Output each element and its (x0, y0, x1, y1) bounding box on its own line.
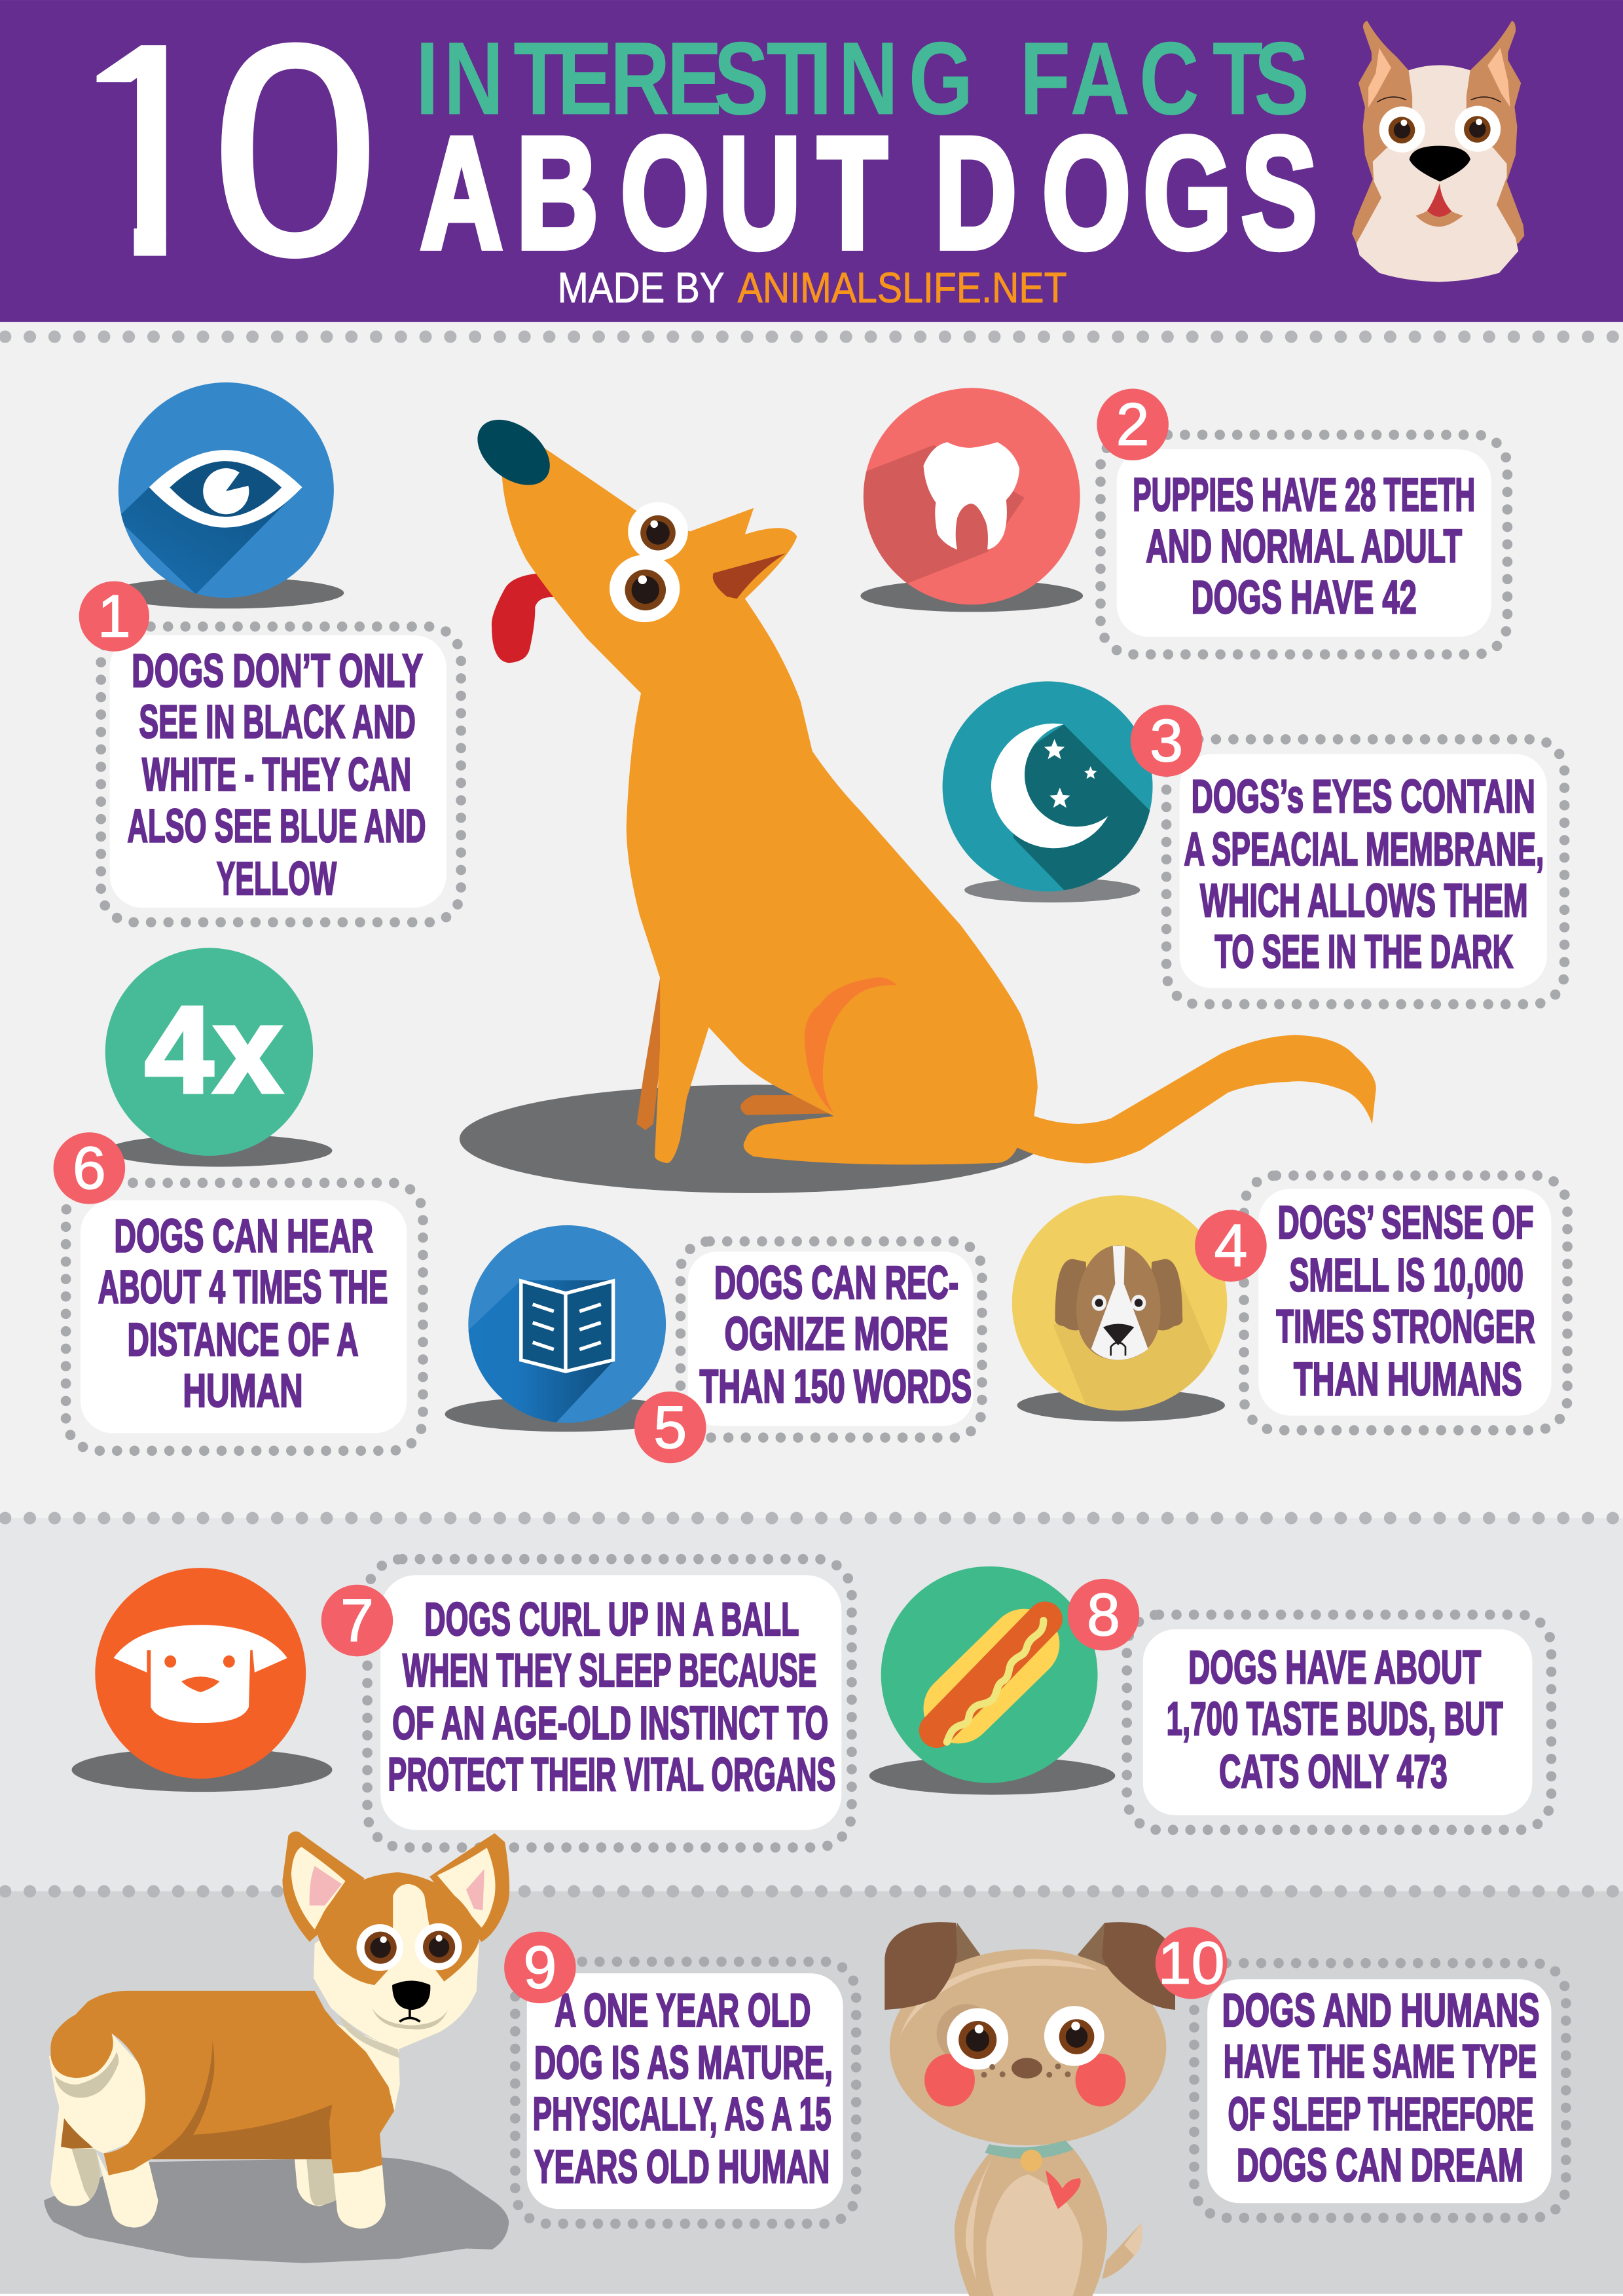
illustration: puppy (884, 1922, 1175, 2296)
number badge (1131, 705, 1202, 777)
text card: PROTECT THEIR VITAL ORGANS (388, 1749, 835, 1801)
number badge: 5 (653, 1394, 687, 1461)
text card: DOGS CAN HEAR (114, 1210, 373, 1262)
head (314, 1889, 479, 2050)
text card: A ONE YEAR OLD (555, 1984, 811, 2037)
byline: MADE BY (558, 264, 724, 312)
far front leg (295, 2159, 336, 2206)
text card: WHEN THEY SLEEP BECAUSE (403, 1644, 816, 1697)
number badge (321, 1585, 393, 1656)
text card: OF AN AGE-OLD INSTINCT TO (392, 1697, 828, 1750)
text card: WHITE - THEY CAN (142, 749, 411, 801)
number badge (1097, 389, 1169, 460)
text card: YELLOW (217, 853, 337, 905)
right ear (429, 1833, 509, 1942)
number badge: 4 (1214, 1213, 1247, 1280)
chest (336, 2024, 400, 2111)
face mask (318, 1872, 479, 1985)
back foot (740, 1095, 834, 1115)
body (955, 2148, 1107, 2296)
head highlight (900, 1959, 1097, 2035)
text card (66, 1183, 423, 1451)
text card (101, 627, 461, 922)
heart (1046, 2170, 1081, 2209)
text card: YEARS OLD HUMAN (534, 2141, 830, 2193)
number badge: 8 (1087, 1582, 1120, 1648)
near rear leg (97, 2152, 158, 2228)
icon: dog head (1352, 21, 1524, 282)
panel: fact 3 (943, 681, 1565, 1004)
thigh (805, 977, 897, 1113)
back ear left (944, 1923, 981, 1984)
text card: THAN 150 WORDS (699, 1361, 972, 1413)
eyes (357, 1923, 462, 1971)
text card: DOGS DON’T ONLY (132, 644, 423, 697)
ear inner (713, 553, 786, 599)
text card (1101, 435, 1507, 654)
illustration: corgi (44, 1832, 509, 2263)
main orange dog illustration (460, 407, 1376, 1193)
far rear thigh shade (61, 2119, 94, 2149)
tongue (492, 573, 556, 663)
title line: interesting facts: INTERESTING FACTS (416, 21, 1309, 137)
tail shade (55, 2052, 119, 2098)
icon: moon (943, 681, 1156, 902)
number badge (79, 581, 149, 652)
floppy ear right (1102, 1922, 1175, 2010)
text card: DOG IS AS MATURE, (534, 2037, 833, 2089)
collar (985, 2140, 1074, 2159)
nose and freckles (981, 2058, 1070, 2079)
back leg (636, 978, 666, 1130)
panel: fact 10 (1156, 1927, 1566, 2218)
text card: DOGS HAVE 42 (1192, 572, 1417, 624)
panel: fact 9 (504, 1932, 856, 2224)
panel: fact 5 (445, 1225, 982, 1463)
text card: ABOUT 4 TIMES THE (98, 1261, 388, 1313)
icon: book (445, 1225, 688, 1432)
text card: DOGS CAN REC- (714, 1257, 958, 1309)
neck shade (337, 2011, 400, 2058)
text card (1127, 1615, 1551, 1830)
upper eye (628, 502, 688, 561)
tail (1102, 2223, 1142, 2279)
number badge: 1 (98, 583, 131, 650)
near front leg (333, 2165, 386, 2229)
icon: hot dog (869, 1566, 1115, 1795)
text card: PHYSICALLY, AS A 15 (533, 2088, 831, 2140)
text card: HUMAN (183, 1365, 303, 1417)
muzzle shade (372, 2009, 448, 2029)
text card (515, 1961, 856, 2224)
floppy ear left (884, 1922, 957, 2010)
text card (1194, 1963, 1566, 2218)
icon: 4x hearing (105, 948, 332, 1167)
panel: fact 8 (869, 1566, 1551, 1830)
eyes (947, 2006, 1104, 2069)
number badge: 2 (1116, 392, 1150, 458)
text card: DISTANCE OF A (127, 1314, 359, 1366)
body coat (50, 1991, 394, 2176)
icon: 4x hearing: 4x (145, 981, 282, 1119)
far front leg shade (306, 2159, 336, 2206)
back ear right (1078, 1923, 1115, 1984)
body (502, 445, 1376, 1164)
icon: dog face (72, 1568, 332, 1792)
number badge (634, 1392, 706, 1463)
far rear leg (50, 2107, 100, 2206)
text card (680, 1242, 982, 1437)
title line: about dogs: ABOUT DOGS (420, 105, 1317, 281)
ground shadow (460, 1084, 1045, 1193)
head (890, 1949, 1166, 2145)
number badge: 7 (340, 1587, 374, 1654)
panel: fact 1 (79, 382, 461, 922)
tail tip (1124, 2223, 1142, 2255)
cheeks (924, 2054, 1125, 2106)
panel: fact 2 (849, 388, 1507, 654)
header banner (0, 0, 1623, 322)
text card: OGNIZE MORE (724, 1308, 949, 1360)
number badge: 3 (1150, 707, 1183, 774)
text card: CATS ONLY 473 (1219, 1745, 1448, 1798)
left ear (282, 1832, 365, 1942)
collar tag (1020, 2150, 1042, 2172)
nose (465, 407, 562, 498)
belly shade (151, 2041, 332, 2159)
text card (1167, 739, 1565, 1004)
belly (986, 2174, 1083, 2296)
number badge (504, 1932, 576, 2003)
panel: fact 7 (72, 1559, 852, 1847)
number badge (54, 1132, 125, 1204)
blaze (390, 1884, 433, 1971)
tail haunch (49, 2033, 145, 2153)
number badge: 9 (523, 1935, 556, 2001)
text card (367, 1559, 852, 1847)
number badge: 6 (73, 1135, 106, 1202)
icon: eye (110, 382, 344, 608)
lower eye (610, 555, 680, 622)
text card: DOGS CURL UP IN A BALL (424, 1593, 799, 1646)
panel: fact 6 (54, 948, 423, 1451)
icon: tooth (849, 388, 1083, 612)
number badge (1195, 1210, 1267, 1282)
ground shadow (44, 2157, 509, 2263)
body highlight (966, 2158, 993, 2281)
eye patch (937, 2004, 995, 2063)
nose and mouth (392, 1980, 430, 2022)
far rear leg shade (71, 2149, 100, 2200)
text card (1244, 1176, 1567, 1430)
number badge: 10 (1158, 1930, 1225, 1997)
text card: SEE IN BLACK AND (139, 696, 416, 749)
number badge (1068, 1579, 1139, 1650)
text card: ALSO SEE BLUE AND (127, 800, 426, 852)
byline site name: ANIMALSLIFE.NET (738, 264, 1067, 312)
panel: fact 4 (1012, 1176, 1567, 1430)
icon: beagle (1012, 1195, 1227, 1428)
text card: AND NORMAL ADULT (1146, 520, 1462, 572)
